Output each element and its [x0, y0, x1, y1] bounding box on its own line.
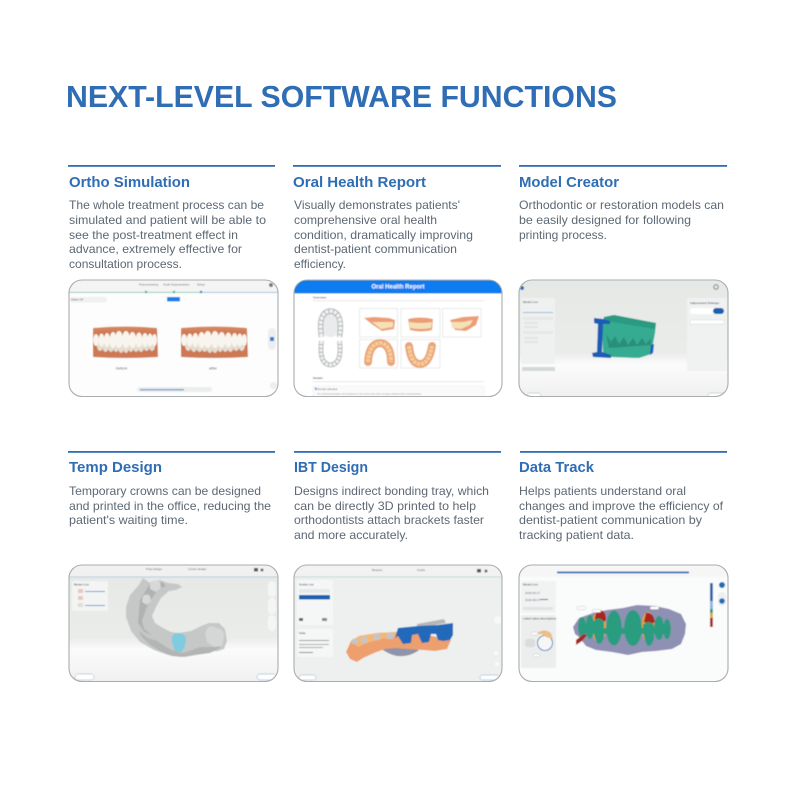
text: Data Track description: changes and improve the efficiency of [519, 499, 724, 513]
screenshot: oral health report page [294, 280, 502, 398]
screenshot: before and after teeth simulation: Setup [197, 282, 205, 286]
screenshot: oral health report page: Overview [313, 296, 327, 300]
label value description panel [521, 615, 557, 668]
model list sidebar: Model List [523, 300, 538, 304]
text: IBT Design description: orthodontists attach brackets faster [294, 513, 484, 527]
adjustment settings sidebar: Adjustment Settings [690, 301, 719, 305]
panel: Model Creator [519, 165, 728, 399]
screenshot: oral health report page: Dental calculus [317, 387, 338, 391]
title: NEXT-LEVEL SOFTWARE FUNCTIONS [66, 80, 617, 114]
text: Data Track description [519, 484, 724, 542]
icon: teeth before [93, 326, 158, 358]
screenshot: temporary crown design [69, 565, 278, 682]
model: orange arch with blue tray [346, 619, 453, 662]
text: Temp Design description: patient's waiting time. [69, 513, 188, 527]
text: Oral Health Report description: efficiency. [294, 257, 346, 271]
panel: Oral Health Report [293, 165, 502, 398]
text: Temp Design description [69, 484, 271, 527]
screenshot: oral health report page: The calcified dental plaque and soft deposits on the surface of the teeth can appear yellowish white or brownish black. [317, 392, 422, 396]
screenshot: temporary crown design: Prep design [146, 567, 162, 571]
screenshot: before and after teeth simulation: Mask Off [71, 298, 83, 302]
screenshot: oral health report page: Details [313, 376, 323, 380]
text: IBT Design description: can be directly 3D printed to help [294, 499, 476, 513]
heading: Temp Design: Temp Design [69, 459, 162, 476]
text: Model Creator description: be easily designed for following [519, 213, 691, 227]
text: Ortho Simulation description [69, 198, 266, 271]
heading: Model Creator: Model Creator [519, 174, 619, 191]
screenshot: oral health report page: Oral Health Report [371, 284, 425, 290]
text: IBT Design description: and more accurately. [294, 528, 408, 542]
tooth images [360, 308, 481, 368]
screenshot: indirect bonding tray design: Bracket [372, 568, 382, 572]
text: Model Creator description: Orthodontic or restoration models can [519, 198, 724, 212]
text: Ortho Simulation description: The whole treatment process can be [69, 198, 264, 212]
help panel: Help [299, 631, 306, 635]
panel: Temp Design [68, 451, 278, 682]
text: Oral Health Report description: dentist-patient communication [294, 242, 457, 256]
model list panel: 2020.05.27 [525, 591, 540, 595]
icon: dental chart [321, 311, 340, 365]
model: grey arch with blue crown [126, 578, 227, 657]
model: teal arch on blue base [592, 315, 656, 358]
icon: teeth after [181, 326, 248, 358]
text: Oral Health Report description: condition, dramatically improving [294, 228, 473, 242]
adjustment settings sidebar [687, 298, 727, 371]
panel: IBT Design [294, 451, 502, 682]
heading: Data Track: Data Track [519, 459, 595, 476]
panel: Data Track [519, 451, 728, 682]
text: Ortho Simulation description: simulated and patient will be able to [69, 213, 266, 227]
colour scale legend [710, 583, 713, 627]
guide list panel [298, 583, 330, 622]
screenshot: patient data tracking [519, 565, 728, 682]
text: Oral Health Report description: comprehensive oral health [294, 213, 437, 227]
heading: Oral Health Report: Oral Health Report [293, 174, 426, 191]
model list panel: Model List [523, 582, 538, 586]
screenshot: indirect bonding tray design [294, 565, 502, 682]
text: IBT Design description [294, 484, 489, 542]
screenshot: before and after teeth simulation: after [209, 366, 218, 370]
text: Temp Design description: Temporary crowns can be designed [69, 484, 261, 498]
text: Data Track description: Helps patients understand oral [519, 484, 686, 498]
heading: IBT Design: IBT Design [294, 459, 368, 476]
timeline bar [557, 572, 689, 573]
panel: Ortho Simulation [68, 165, 278, 397]
model list panel [522, 582, 555, 612]
model list panel: 2020.08.27 [525, 598, 540, 602]
text: Temp Design description: and printed in the office, reducing the [69, 499, 271, 513]
text: Ortho Simulation description: consultation process. [69, 257, 182, 271]
screenshot: before and after teeth simulation: before [116, 366, 128, 370]
screenshot: before and after teeth simulation [69, 280, 278, 397]
screenshot: before and after teeth simulation: Preprocessing [139, 282, 159, 286]
text: Ortho Simulation description: see the post-treatment effect in [69, 228, 238, 242]
text: Model Creator description: printing process. [519, 228, 607, 242]
text: Model Creator description [519, 198, 724, 242]
guide list panel: Guide List [299, 582, 314, 586]
text: Oral Health Report description: Visually demonstrates patients' [294, 198, 460, 212]
screenshot: temporary crown design: Crown design [188, 567, 207, 571]
heading: Ortho Simulation: Ortho Simulation [69, 174, 190, 191]
model: deviation colour map of teeth [573, 605, 686, 655]
model list panel [72, 581, 108, 611]
text: Ortho Simulation description: advance, extremely effective for [69, 242, 242, 256]
help panel [298, 632, 329, 654]
screenshot: 3D model creator [519, 280, 728, 399]
screenshot: before and after teeth simulation: Tooth Segmentation [163, 282, 190, 286]
model list panel: Model List [74, 582, 89, 586]
text: Data Track description: tracking patient data. [519, 528, 634, 542]
model list sidebar [521, 298, 555, 371]
text: Data Track description: dentist-patient communication by [519, 513, 702, 527]
text: IBT Design description: Designs indirect bonding tray, which [294, 484, 489, 498]
text: Oral Health Report description [294, 198, 473, 271]
label value description panel: Label value description [523, 616, 557, 620]
screenshot: indirect bonding tray design: Guide [417, 568, 425, 572]
